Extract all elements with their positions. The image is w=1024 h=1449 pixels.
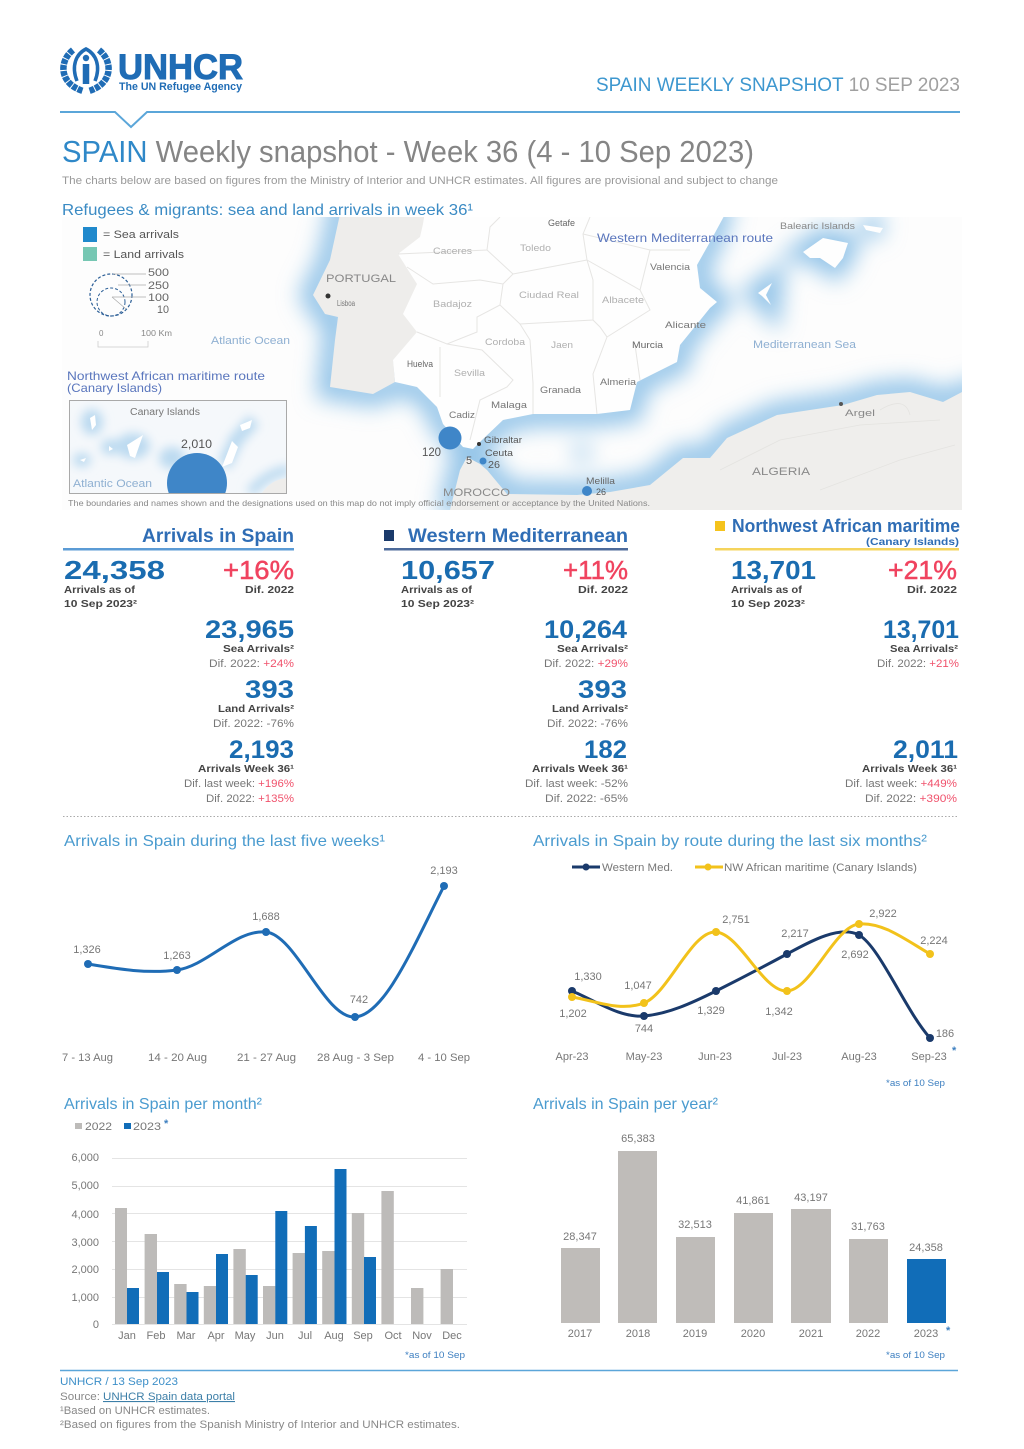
panel: Western Mediterranean: Sea Arrivals²	[557, 643, 629, 655]
line chart: by route: Aug-23	[841, 1051, 877, 1063]
map markers: 120	[422, 445, 441, 459]
chart legend: 2023	[133, 1121, 161, 1133]
panel: Arrivals in Spain: Sea Arrivals²	[223, 643, 295, 655]
bar chart: per month: 3,000	[71, 1237, 99, 1249]
map labels: Albacete	[602, 295, 644, 306]
bar chart: per year: 2017	[568, 1328, 592, 1340]
map labels: Sevilla	[454, 368, 486, 379]
chart legend	[572, 862, 917, 874]
map labels: Balearic Islands	[780, 221, 855, 232]
bar chart: per year: 2018	[626, 1328, 650, 1340]
map labels: Mediterranean Sea	[753, 339, 857, 351]
map heading: Refugees & migrants: sea and land arrivals in week 36¹	[62, 202, 473, 219]
panel: Arrivals in Spain: Dif. 2022: +24%	[209, 658, 294, 670]
line chart: by route: Sep-23	[911, 1051, 947, 1063]
line chart: by route: 744	[635, 1023, 653, 1035]
panel: Arrivals in Spain: Arrivals Week 36¹	[198, 763, 295, 775]
map legend: 100	[148, 292, 169, 304]
line chart: last five weeks: 1,688	[252, 911, 280, 923]
line chart: by route: May-23	[626, 1051, 662, 1063]
map legend	[83, 227, 185, 347]
line chart: last five weeks	[62, 833, 470, 1064]
map labels: ALGERIA	[752, 466, 811, 478]
islands	[803, 238, 848, 268]
line chart: last five weeks: 14 - 20 Aug	[148, 1052, 207, 1064]
map labels: Getafe	[548, 218, 575, 229]
subtitle: The charts below are based on figures from the Ministry of Interior and UNHCR estimates. All figures are provisional and subject to change	[62, 175, 778, 187]
note: *as of 10 Sep	[886, 1078, 945, 1089]
panel: Northwest African maritime: 10 Sep 2023²	[731, 598, 806, 610]
inset: Canary Islands: 2,010	[181, 437, 212, 451]
map labels: Atlantic Ocean	[211, 335, 290, 347]
footer: UNHCR Spain data portal	[103, 1391, 235, 1403]
line chart: by route: Apr-23	[555, 1051, 589, 1063]
chart legend: Western Med.	[602, 862, 673, 874]
panel: Western Mediterranean: Arrivals as of	[401, 584, 473, 596]
bar chart: per month: Jan	[118, 1330, 136, 1342]
bar chart: per month: Oct	[384, 1330, 402, 1342]
header rule with notch	[60, 112, 960, 127]
panel: Arrivals in Spain: Dif. last week: +196%	[184, 778, 294, 790]
bar chart: per year: 41,861	[736, 1195, 770, 1207]
panel: Northwest African maritime: 2,011	[893, 736, 958, 764]
bar chart: per month: Sep	[353, 1330, 373, 1342]
line chart: by route: 2,217	[781, 928, 809, 940]
map labels: Malaga	[491, 400, 528, 411]
bar chart: per month: Mar	[177, 1330, 196, 1342]
map labels: Huelva	[407, 359, 434, 370]
line chart: by route: 1,329	[697, 1005, 725, 1017]
panel: Western Mediterranean: 182	[584, 736, 627, 764]
note: *as of 10 Sep	[886, 1350, 945, 1361]
bar chart: per year: 32,513	[678, 1219, 712, 1231]
map labels: MOROCCO	[443, 487, 510, 499]
bar chart: per month	[64, 1096, 467, 1361]
footer: ²Based on figures from the Spanish Ministry of Interior and UNHCR estimates.	[60, 1419, 460, 1431]
bar chart: per year: 2020	[741, 1328, 765, 1340]
title: SPAIN Weekly snapshot - Week 36 (4 - 10 Sep 2023)	[62, 134, 754, 169]
panel: Western Mediterranean: Dif. 2022: +29%	[544, 658, 628, 670]
map labels: Granada	[540, 385, 582, 396]
line chart: last five weeks: 1,326	[73, 944, 101, 956]
desert texture	[720, 404, 955, 490]
line chart: last five weeks: 1,263	[163, 950, 191, 962]
bar chart: per year: 65,383	[621, 1133, 655, 1145]
map labels: Cadiz	[449, 410, 475, 421]
panel: Northwest African maritime: Northwest African maritime	[732, 516, 960, 536]
panel: Western Mediterranean: Dif. last week: -52%	[525, 778, 628, 790]
map labels: Gibraltar	[484, 435, 522, 446]
province boundaries	[398, 217, 690, 440]
bar chart: per year: 2019	[683, 1328, 707, 1340]
map legend: 10	[157, 304, 169, 316]
map labels: Argel	[845, 408, 875, 419]
bar chart: per year: 28,347	[563, 1231, 597, 1243]
line chart: last five weeks: Arrivals in Spain during the last five weeks¹	[64, 833, 385, 850]
map labels	[211, 218, 875, 499]
map markers	[326, 294, 843, 497]
bar chart: per month: 0	[93, 1319, 99, 1331]
route labels: Northwest African maritime route	[67, 369, 265, 383]
panel: Northwest African maritime: +21%	[888, 555, 957, 585]
logo: UNHCR	[63, 48, 243, 93]
bar chart: per month: Nov	[412, 1330, 432, 1342]
panel: Western Mediterranean: Dif. 2022: -65%	[545, 793, 628, 805]
panel: Northwest African maritime: Dif. 2022	[907, 584, 957, 596]
chart legend	[75, 1118, 169, 1133]
map legend: 250	[148, 280, 169, 292]
land: Spain	[393, 217, 724, 449]
land: North Africa	[450, 392, 962, 510]
inset: Canary Islands: Canary Islands	[130, 407, 200, 418]
map disclaimer: The boundaries and names shown and the designations used on this map do not imply official endorsement or acceptance by the United Nations.	[68, 498, 650, 508]
map labels: Melilla	[586, 476, 616, 487]
map labels: Caceres	[433, 246, 472, 257]
panel: Western Mediterranean: 10,657	[401, 555, 495, 585]
map legend: 500	[148, 267, 169, 279]
map labels: Valencia	[650, 262, 691, 273]
bar chart: per month: Dec	[442, 1330, 462, 1342]
map labels: Toledo	[520, 243, 551, 254]
map labels: Alicante	[665, 320, 706, 331]
line chart: by route: 2,751	[722, 914, 750, 926]
footer	[60, 1370, 958, 1431]
panel: map	[68, 217, 962, 510]
line chart: by route: 1,342	[765, 1006, 793, 1018]
map labels: Badajoz	[433, 299, 472, 310]
map markers: 26	[488, 460, 500, 471]
line chart: by route: 1,047	[624, 980, 652, 992]
bar chart: per month: Aug	[324, 1330, 344, 1342]
logo: UNHCR: UNHCR	[118, 48, 243, 87]
panel: Northwest African maritime: Dif. last week: +449%	[845, 778, 957, 790]
bar chart: per year: Arrivals in Spain per year²	[533, 1096, 719, 1113]
line chart: last five weeks: 21 - 27 Aug	[237, 1052, 296, 1064]
map legend: 100 Km	[141, 329, 172, 338]
inset: Canary Islands: Atlantic Ocean	[73, 478, 152, 490]
panel: Arrivals in Spain: 2,193	[229, 736, 294, 764]
panel: Northwest African maritime: 13,701	[883, 616, 959, 644]
line chart: by route: 2,922	[869, 908, 897, 920]
route labels: (Canary Islands)	[67, 381, 162, 395]
bar chart: per month: Jun	[266, 1330, 284, 1342]
map labels: Ceuta	[485, 448, 514, 459]
line chart: by route: *	[952, 1045, 957, 1057]
line chart: by route: 1,202	[559, 1008, 587, 1020]
bar chart: per month: Feb	[147, 1330, 165, 1342]
bar chart: per year: 43,197	[794, 1192, 828, 1204]
map legend: = Land arrivals	[103, 249, 185, 261]
footer: UNHCR / 13 Sep 2023	[60, 1376, 178, 1388]
map labels: Lisboa	[337, 299, 355, 308]
bar chart: per year: 2022	[856, 1328, 880, 1340]
panel: Northwest African maritime: Dif. 2022: +390%	[865, 793, 957, 805]
map legend: = Sea arrivals	[103, 229, 180, 241]
line chart: by route: Jun-23	[698, 1051, 732, 1063]
map labels: Jaen	[551, 340, 573, 351]
bar chart: per month: May	[235, 1330, 256, 1342]
bar chart: per month: 5,000	[71, 1180, 99, 1192]
line chart: last five weeks: 2,193	[430, 865, 458, 877]
panel: Northwest African maritime: Dif. 2022: +21%	[877, 658, 959, 670]
map labels: PORTUGAL	[326, 273, 396, 285]
panel: Western Mediterranean: +11%	[563, 555, 628, 585]
header label: SPAIN WEEKLY SNAPSHOT 10 SEP 2023	[596, 75, 960, 96]
panel: Western Mediterranean: Dif. 2022	[578, 584, 628, 596]
bar chart: per year: *	[946, 1325, 951, 1337]
inset: Canary Islands	[69, 400, 287, 494]
panel: Northwest African maritime: (Canary Islands)	[866, 536, 959, 548]
bar chart: per year: 31,763	[851, 1221, 885, 1233]
panel: Northwest African maritime: 13,701	[731, 555, 816, 585]
line chart: by route: 2,692	[841, 949, 869, 961]
panel: Arrivals in Spain: 24,358	[64, 555, 165, 585]
panel: Western Mediterranean: Arrivals Week 36¹	[532, 763, 629, 775]
footer: ¹Based on UNHCR estimates.	[60, 1405, 210, 1417]
panel: Arrivals in Spain: Arrivals in Spain	[142, 526, 294, 547]
bar chart: per month: 4,000	[71, 1209, 99, 1221]
map legend: 0	[99, 329, 104, 338]
panel: Arrivals in Spain	[63, 526, 295, 805]
line chart: by route: 1,330	[574, 971, 602, 983]
map labels: Almeria	[600, 377, 637, 388]
bar chart: per month: Jul	[298, 1330, 312, 1342]
panel: Arrivals in Spain: Arrivals as of	[64, 584, 136, 596]
line chart: by route: Arrivals in Spain by route during the last six months²	[533, 833, 928, 850]
bar chart: per month: 1,000	[71, 1292, 99, 1304]
bar chart: per year: 2023	[914, 1328, 938, 1340]
panel: Western Mediterranean: Western Mediterranean	[408, 526, 628, 547]
panel: Arrivals in Spain: 393	[245, 676, 294, 704]
map markers: 26	[596, 487, 606, 497]
panel: Western Mediterranean: Dif. 2022: -76%	[547, 718, 628, 730]
line chart: by route	[533, 833, 957, 1089]
map labels: Murcia	[632, 340, 664, 351]
logo: UNHCR: The UN Refugee Agency	[119, 81, 243, 93]
chart legend: NW African maritime (Canary Islands)	[724, 862, 917, 874]
icon: UNHCR emblem	[63, 49, 109, 91]
map labels: Ciudad Real	[519, 290, 579, 301]
line chart: by route: 2,224	[920, 935, 948, 947]
panel: Northwest African maritime	[715, 516, 960, 805]
coastal glow	[313, 190, 985, 515]
bar chart: per year: 2021	[799, 1328, 823, 1340]
panel: Northwest African maritime: Sea Arrivals²	[890, 643, 959, 655]
chart legend: *	[164, 1118, 169, 1130]
bar chart: per month: Arrivals in Spain per month²	[64, 1096, 263, 1113]
bar chart: per year: 24,358	[909, 1242, 943, 1254]
panel: Western Mediterranean: 10,264	[544, 616, 627, 644]
map labels: Cordoba	[485, 337, 526, 348]
route labels	[67, 231, 773, 395]
footer: Source:	[60, 1391, 100, 1403]
note: *as of 10 Sep	[405, 1350, 465, 1361]
bar chart: per month: Apr	[207, 1330, 225, 1342]
land: Portugal	[313, 205, 426, 394]
line chart: last five weeks: 4 - 10 Sep	[418, 1052, 470, 1064]
bar chart: per month: 6,000	[71, 1152, 99, 1164]
chart legend: 2022	[85, 1121, 112, 1133]
map markers: 5	[466, 455, 472, 467]
panel: Arrivals in Spain: +16%	[223, 555, 294, 585]
route labels: Western Mediterranean route	[597, 231, 773, 245]
line chart: last five weeks: 742	[350, 994, 368, 1006]
panel: Western Mediterranean: 10 Sep 2023²	[401, 598, 475, 610]
panel: Arrivals in Spain: Dif. 2022: -76%	[213, 718, 294, 730]
line chart: last five weeks: 28 Aug - 3 Sep	[317, 1052, 394, 1064]
panel: Arrivals in Spain: Dif. 2022	[245, 584, 294, 596]
panel: Arrivals in Spain: Dif. 2022: +135%	[206, 793, 294, 805]
bar chart: per year	[533, 1096, 951, 1361]
panel: Western Mediterranean	[384, 526, 629, 805]
panel: Arrivals in Spain: Land Arrivals²	[218, 703, 295, 715]
panel: Arrivals in Spain: 10 Sep 2023²	[64, 598, 138, 610]
line chart: by route: Jul-23	[772, 1051, 802, 1063]
panel: Western Mediterranean: 393	[578, 676, 627, 704]
line chart: last five weeks: 7 - 13 Aug	[62, 1052, 113, 1064]
panel: Northwest African maritime: Arrivals Week 36¹	[862, 763, 958, 775]
line chart: by route: 186	[936, 1028, 954, 1040]
panel: Arrivals in Spain: 23,965	[205, 616, 294, 644]
bar chart: per month: 2,000	[71, 1264, 99, 1276]
panel: Northwest African maritime: Arrivals as of	[731, 584, 803, 596]
panel: Western Mediterranean: Land Arrivals²	[552, 703, 629, 715]
